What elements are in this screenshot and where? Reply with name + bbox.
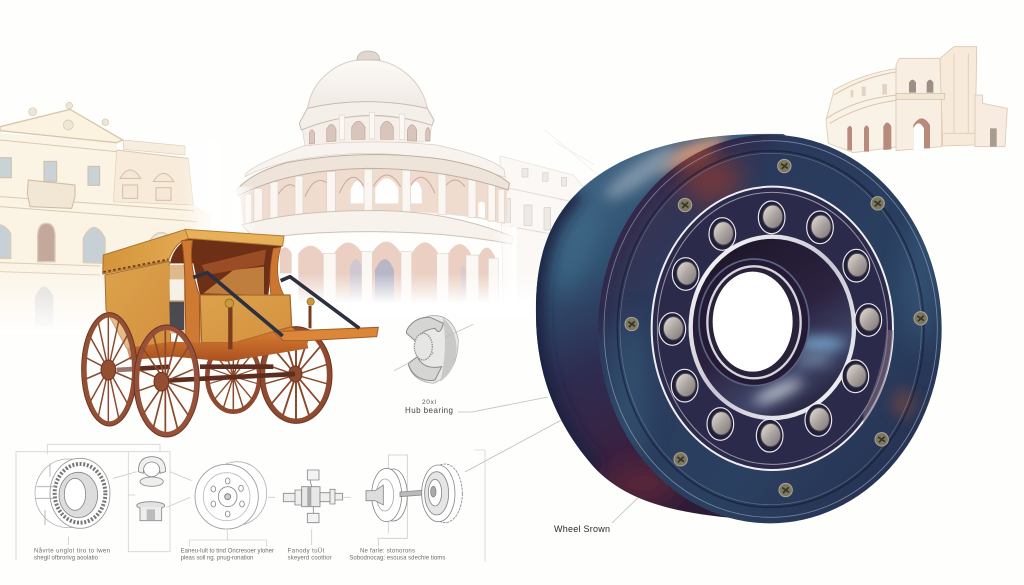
middle band xyxy=(242,211,513,244)
side panel xyxy=(105,261,171,348)
diagram captions: Fanody tuÜt xyxy=(288,547,325,554)
outer screws xyxy=(625,159,927,497)
race highlights xyxy=(752,337,845,407)
curved wing ledges xyxy=(827,72,898,123)
rotunda fades xyxy=(223,273,597,303)
right annex xyxy=(975,95,1007,147)
side opening xyxy=(169,265,185,333)
label name: Hub bearing xyxy=(405,406,453,415)
large bolts xyxy=(659,201,882,452)
pediment xyxy=(0,109,123,143)
cupola xyxy=(357,51,380,60)
front near wheel xyxy=(134,325,199,437)
right wing xyxy=(500,156,593,307)
diagram captions: pleas soll ng. pnug-ronation xyxy=(181,556,253,562)
axle and undercarriage xyxy=(117,367,295,381)
building: left palace xyxy=(0,102,220,340)
diagram captions: Sobodnocag: esousa sdechie tioms xyxy=(349,556,445,562)
drum windows xyxy=(309,121,430,144)
rear near wheel xyxy=(260,327,332,423)
drum pilasters xyxy=(339,112,405,140)
centre block xyxy=(896,58,942,151)
upper columns xyxy=(245,169,505,224)
cylinder body xyxy=(536,134,786,518)
cornice xyxy=(896,93,945,99)
upper arches xyxy=(277,175,465,197)
frame lines xyxy=(16,444,485,562)
diagram captions: Eaneu-lult to tind Oncresoer yloher xyxy=(181,548,274,554)
diagram captions xyxy=(34,547,445,562)
openings xyxy=(351,178,485,218)
label year: 20xl xyxy=(422,399,437,406)
roof side xyxy=(103,229,189,274)
wing pediment windows xyxy=(120,170,174,200)
lower chassis xyxy=(127,327,308,362)
diagram 3: joint xyxy=(268,470,351,545)
bore step xyxy=(699,259,809,386)
interior dark xyxy=(170,238,283,295)
diagram captions: Nåvrte unglol tiro to lwen xyxy=(34,547,110,554)
hub bearing label xyxy=(405,399,453,415)
large wheel hub xyxy=(530,130,942,523)
bolt recess xyxy=(652,187,893,470)
recess shine xyxy=(863,330,893,423)
wing wall tint xyxy=(113,150,193,205)
dome xyxy=(307,59,427,109)
face disc xyxy=(598,135,942,523)
lower arcade inner shade xyxy=(350,259,466,303)
lower columns xyxy=(323,252,498,303)
arch light xyxy=(913,123,924,149)
centre hole xyxy=(713,272,793,372)
arched windows xyxy=(0,225,170,263)
diagram 1 arrows xyxy=(128,472,192,507)
face grooves xyxy=(604,141,937,517)
arched openings xyxy=(847,118,997,152)
rails xyxy=(193,273,359,336)
wing balustrade xyxy=(123,140,185,155)
leader lines xyxy=(458,130,650,523)
cornice xyxy=(237,155,509,196)
diagram captions: Ne farle: stonorons xyxy=(360,548,415,554)
diagram captions: shegil ofbrorivg aoolatio xyxy=(34,556,99,562)
front back wheel xyxy=(82,313,137,426)
fade overlays xyxy=(0,260,220,333)
diagram 1: small parts xyxy=(137,457,166,521)
upper windows xyxy=(909,80,933,93)
rear far wheel xyxy=(207,341,259,413)
pediment statues and medallion xyxy=(29,102,109,130)
bearing leader lines xyxy=(394,324,473,371)
diagram 4: shaft and wheel xyxy=(366,455,462,547)
diagram captions: skeyerd coottior xyxy=(288,556,332,562)
lower arch xyxy=(35,287,53,327)
tower xyxy=(940,47,977,146)
front pillars xyxy=(182,240,200,344)
palace ledges xyxy=(0,140,197,275)
front box xyxy=(200,295,292,343)
small hub bearing sketch xyxy=(394,315,473,383)
footboard xyxy=(273,327,378,341)
drum xyxy=(302,116,432,146)
palace wall xyxy=(0,133,212,330)
bearing core xyxy=(414,333,432,360)
inner panel xyxy=(203,267,264,295)
technical diagrams strip xyxy=(16,444,485,562)
carriage illustration xyxy=(82,229,378,437)
building: central rotunda xyxy=(223,51,597,316)
curved wing xyxy=(826,68,898,153)
diagram 2: wheel disc xyxy=(195,462,267,529)
bearing rim highlight xyxy=(440,317,457,382)
building: top right theatre xyxy=(826,47,1007,153)
balcony band xyxy=(245,142,505,177)
brass posts xyxy=(225,298,314,349)
upper windows xyxy=(0,158,100,185)
bearing rollers C-shape xyxy=(406,317,443,380)
face glows xyxy=(598,135,937,463)
lower arcade xyxy=(280,242,495,303)
door xyxy=(38,223,55,262)
bearing outer race xyxy=(408,315,458,383)
roof front xyxy=(185,229,284,246)
inner race xyxy=(691,237,854,418)
upper colonnade back xyxy=(240,169,507,226)
dome base xyxy=(299,102,434,130)
balcony xyxy=(27,180,75,208)
diagram 1: bearing cutaway xyxy=(35,458,137,545)
wheel label: Wheel Srown xyxy=(554,524,610,534)
